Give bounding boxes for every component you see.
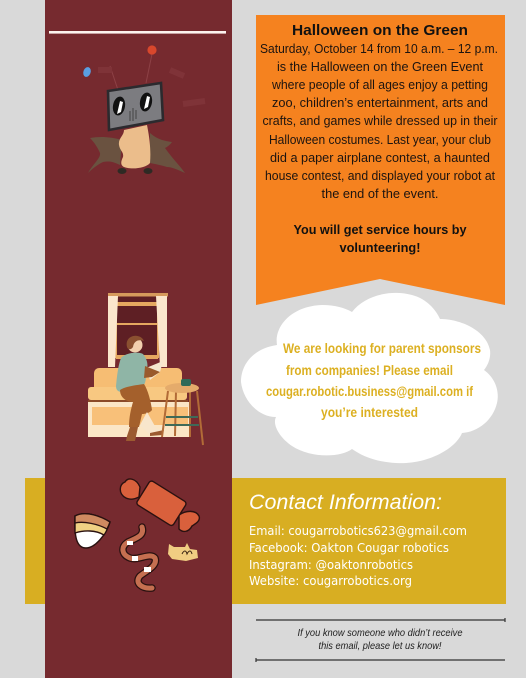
text block: parent sponsors: from companies! Please email	[286, 363, 453, 378]
text block: parent sponsors: cougar.robotic.business@gmail.com if	[266, 384, 473, 399]
text block: event description: crafts, and games while dressed up in their	[262, 113, 498, 128]
text block: footer note	[298, 628, 463, 652]
text block: footer note: If you know someone who didn’t receive	[298, 628, 463, 639]
text block: contact details: Instagram: @oaktonrobotics	[249, 558, 413, 572]
text block: event description: where people of all ages enjoy a petting	[271, 77, 488, 92]
text block: contact details: Website: cougarrobotics.org	[249, 574, 412, 588]
text block: service hours	[294, 222, 467, 255]
icon: robot bat	[82, 45, 205, 174]
icon: person reading by a window	[88, 293, 203, 445]
text block: event description: Halloween costumes. Last year, your club	[269, 132, 491, 147]
heading: Contact Information: Contact Information:	[249, 491, 442, 514]
panel: orange event banner	[256, 15, 505, 305]
text block: contact details	[249, 524, 467, 588]
text block: event description: the end of the event.	[322, 186, 438, 201]
panel: maroon column	[45, 0, 232, 678]
footer bottom rule	[256, 658, 505, 662]
panel: contact band	[25, 478, 506, 604]
text block: event description	[260, 41, 498, 201]
text block: service hours: volunteering!	[340, 240, 420, 255]
text block: parent sponsors	[266, 341, 481, 420]
icon: Halloween candy	[75, 479, 199, 588]
text block: parent sponsors: We are looking for parent sponsors	[283, 341, 481, 356]
text block: contact details: Email: cougarrobotics623@gmail.com	[249, 524, 467, 538]
footer top rule	[256, 618, 505, 622]
text block: service hours: You will get service hours by	[294, 222, 467, 237]
text block: contact details: Facebook: Oakton Cougar robotics	[249, 541, 449, 555]
text block: event description: did a paper airplane contest, a haunted	[270, 150, 490, 165]
text block: event description: Saturday, October 14 from 10 a.m. – 12 p.m.	[260, 41, 498, 56]
top white rule	[49, 31, 226, 34]
text block: event description: is the Halloween on the Green Event	[277, 59, 483, 74]
heading: Halloween on the Green: Halloween on the Green	[292, 23, 468, 39]
text block: footer note: this email, please let us know!	[318, 641, 442, 652]
text block: parent sponsors: you’re interested	[321, 405, 418, 420]
text block: event description: house contest, and displayed your robot at	[265, 168, 495, 183]
text block: event description: zoo, children’s entertainment, arts and	[272, 95, 488, 110]
panel: cloud callout	[241, 293, 498, 463]
